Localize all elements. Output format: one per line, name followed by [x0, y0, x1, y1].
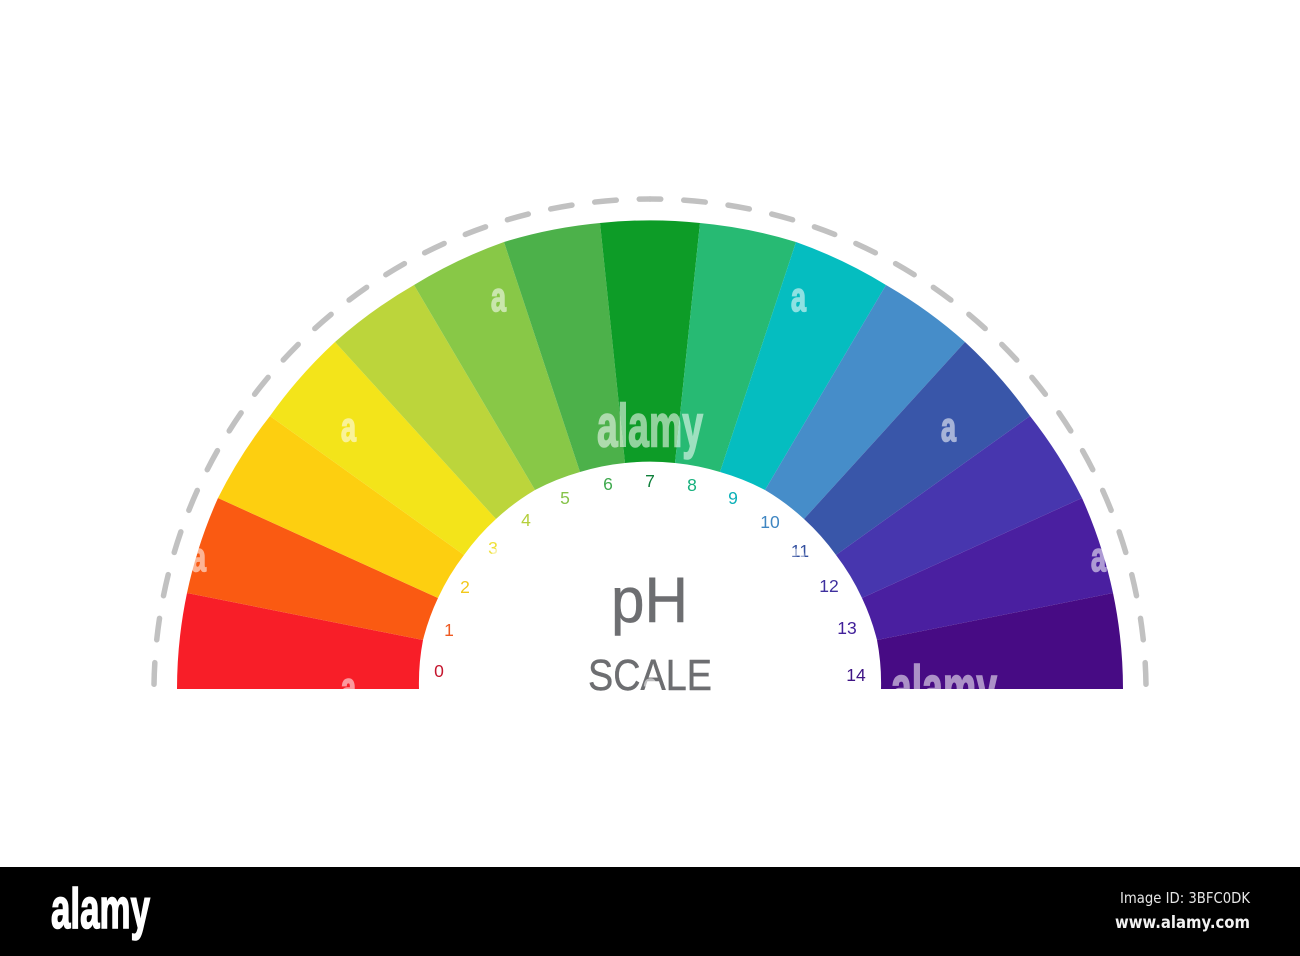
scale numbers 0 to 14: 6 — [603, 474, 613, 494]
watermarks: a — [491, 274, 507, 320]
watermarks: a — [191, 534, 207, 580]
segment pH 8 — [675, 223, 796, 472]
segment pH 1 — [187, 498, 438, 640]
scale numbers 0 to 14: 14 — [846, 665, 866, 685]
footer logo: alamy — [51, 877, 150, 941]
watermarks — [191, 274, 1107, 721]
watermarks: alamy — [891, 654, 997, 721]
website: www.alamy.com — [1115, 913, 1250, 933]
segment pH 7 — [600, 220, 700, 463]
scale numbers 0 to 14: 13 — [837, 618, 857, 638]
image id: Image ID: 3BFC0DK — [1120, 889, 1251, 907]
scale numbers 0 to 14: 7 — [645, 471, 655, 491]
scale numbers 0 to 14 — [434, 471, 866, 685]
scale numbers 0 to 14: 2 — [460, 577, 470, 597]
segment pH 6 — [504, 223, 625, 472]
rainbow gauge segments — [177, 220, 1123, 689]
watermarks: a — [643, 664, 659, 710]
watermarks: a — [1091, 534, 1107, 580]
scale numbers 0 to 14: 1 — [444, 620, 454, 640]
segment pH 9 — [720, 242, 886, 490]
segment pH 13 — [862, 498, 1113, 640]
footer bar — [0, 867, 1300, 956]
watermarks: a — [791, 534, 807, 580]
scale numbers 0 to 14: 12 — [819, 576, 839, 596]
watermarks: a — [941, 404, 957, 450]
segment pH 10 — [765, 285, 965, 519]
scale numbers 0 to 14: 10 — [760, 512, 780, 532]
segment pH 0 — [177, 593, 423, 689]
watermarks: a — [491, 534, 507, 580]
segment pH 14 — [877, 593, 1123, 689]
scale numbers 0 to 14: 3 — [488, 538, 498, 558]
scale numbers 0 to 14: 4 — [521, 510, 531, 530]
watermarks: a — [341, 664, 357, 710]
dashed outer arc — [154, 199, 1146, 685]
scale numbers 0 to 14: 8 — [687, 475, 697, 495]
segment pH 12 — [836, 416, 1082, 598]
title: pH: pH — [611, 564, 688, 636]
watermarks: a — [791, 274, 807, 320]
scale numbers 0 to 14: 5 — [560, 488, 570, 508]
watermarks: a — [341, 404, 357, 450]
scale numbers 0 to 14: 11 — [791, 541, 809, 561]
segment pH 3 — [270, 342, 496, 555]
scale numbers 0 to 14: 0 — [434, 661, 444, 681]
segment pH 5 — [414, 242, 580, 490]
segment pH 11 — [804, 342, 1030, 555]
segment pH 2 — [218, 416, 464, 598]
scale numbers 0 to 14: 9 — [728, 488, 738, 508]
title: SCALE: SCALE — [588, 651, 712, 700]
watermarks: alamy — [597, 392, 703, 460]
segment pH 4 — [335, 285, 535, 519]
